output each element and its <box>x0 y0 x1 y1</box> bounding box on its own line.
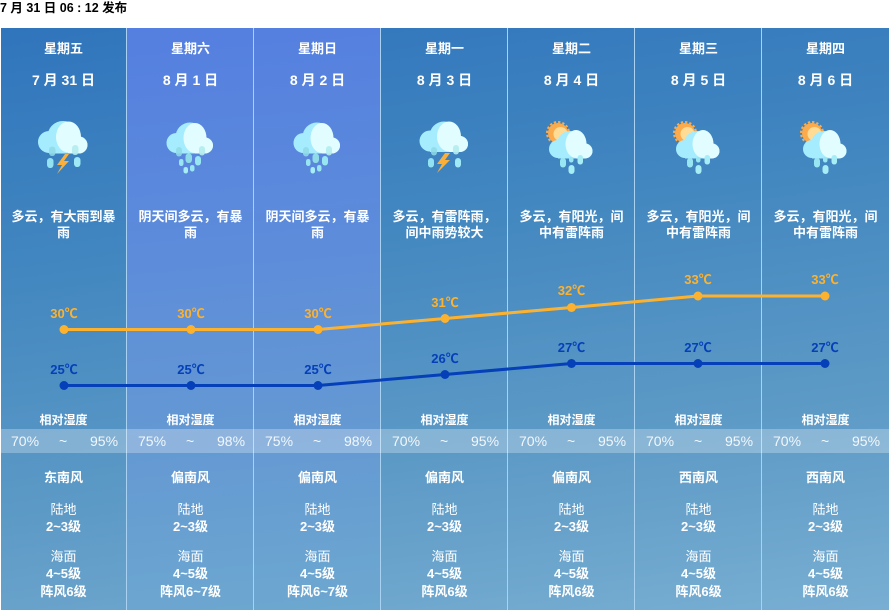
chart: high temperature line: 30℃ <box>50 306 78 321</box>
chart: high temperature line: 33℃ <box>811 272 839 287</box>
column: Sunday 8/2: 98% <box>344 433 372 449</box>
icon: sun and showers 8/5 <box>674 122 720 174</box>
chart: high temperature line: 31℃ <box>431 295 459 310</box>
column: Friday 7/31: 陆地 <box>50 502 76 517</box>
column: Friday 7/31: 东南风 <box>44 470 83 485</box>
column: Monday 8/3: 95% <box>471 433 499 449</box>
chart: low temperature line: 27℃ <box>684 340 712 355</box>
column: Tuesday 8/4: 2~3级 <box>554 519 589 534</box>
column: Thursday 8/6: 相对湿度 <box>801 413 850 427</box>
column: Friday 7/31: 多云，有大雨到暴雨 <box>11 209 116 240</box>
column: Sunday 8/2 <box>265 41 372 599</box>
chart: high temperature line: 33℃ <box>684 272 712 287</box>
chart: low temperature line: 25℃ <box>50 362 78 377</box>
column: Thursday 8/6: 西南风 <box>806 470 845 485</box>
column: Saturday 8/1: 海面 <box>177 549 204 564</box>
column: Tuesday 8/4: 相对湿度 <box>547 413 596 427</box>
column: Wednesday 8/5: 多云，有阳光，间中有雷阵雨 <box>646 209 750 240</box>
icon: thunderstorm 8/3 <box>420 122 468 173</box>
chart: high temperature line: 32℃ <box>558 283 585 298</box>
column: Friday 7/31: 星期五 <box>44 41 83 56</box>
column: Friday 7/31 <box>11 41 118 599</box>
column: Sunday 8/2: 星期日 <box>298 41 337 56</box>
column: Saturday 8/1: 98% <box>217 433 245 449</box>
column: Friday 7/31: 2~3级 <box>46 519 81 534</box>
column: Sunday 8/2: 海面 <box>304 549 330 564</box>
column: Monday 8/3: 偏南风 <box>425 470 464 485</box>
column: Saturday 8/1: 陆地 <box>177 502 204 517</box>
icon: heavy rain 8/1 <box>166 122 213 174</box>
column: Saturday 8/1: 2~3级 <box>173 519 208 534</box>
column: Monday 8/3: 4~5级 <box>427 566 462 581</box>
column: Wednesday 8/5 <box>646 41 753 599</box>
icon: sun and showers 8/4 <box>547 122 592 174</box>
chart: high temperature line: 30℃ <box>177 306 205 321</box>
column: Friday 7/31: 95% <box>90 433 118 449</box>
column: Tuesday 8/4: 星期二 <box>552 41 591 56</box>
column: Sunday 8/2: 陆地 <box>304 502 330 517</box>
highlighted weekend columns <box>127 28 380 610</box>
column: Wednesday 8/5: ~ <box>694 433 702 449</box>
column: Monday 8/3: 8 月 3 日 <box>417 72 472 88</box>
column: Thursday 8/6: 多云，有阳光，间中有雷阵雨 <box>773 209 878 240</box>
column: Friday 7/31: 相对湿度 <box>39 413 88 427</box>
column: Friday 7/31: 70% <box>11 433 39 449</box>
column: Wednesday 8/5: 海面 <box>685 549 712 564</box>
column: Wednesday 8/5: 西南风 <box>679 470 718 485</box>
column: Thursday 8/6: 星期四 <box>806 41 845 56</box>
column: Tuesday 8/4: 95% <box>598 433 626 449</box>
column: Wednesday 8/5: 阵风6级 <box>675 584 722 599</box>
column: Monday 8/3: 70% <box>392 433 420 449</box>
column: Tuesday 8/4: 陆地 <box>558 502 584 517</box>
column: Tuesday 8/4: 阵风6级 <box>548 584 595 599</box>
column: Wednesday 8/5: 4~5级 <box>681 566 716 581</box>
column: Wednesday 8/5: 相对湿度 <box>674 413 722 427</box>
column: Friday 7/31: 7 月 31 日 <box>32 72 95 88</box>
column: Monday 8/3: 海面 <box>431 549 458 564</box>
column: Saturday 8/1: 4~5级 <box>173 566 208 581</box>
column: Sunday 8/2: 相对湿度 <box>293 413 342 427</box>
chart: low temperature line: 25℃ <box>304 362 332 377</box>
column: Saturday 8/1: 相对湿度 <box>166 413 214 427</box>
column: Saturday 8/1: 星期六 <box>171 41 210 56</box>
column: Friday 7/31: 海面 <box>50 549 76 564</box>
column: Tuesday 8/4: ~ <box>567 433 575 449</box>
column: Saturday 8/1: 75% <box>138 433 166 449</box>
column: Saturday 8/1: 阴天间多云，有暴雨 <box>138 209 242 240</box>
column: Sunday 8/2: ~ <box>313 433 321 449</box>
column: Thursday 8/6: 95% <box>852 433 880 449</box>
column: Saturday 8/1: 阵风6~7级 <box>160 584 221 599</box>
chart: low temperature line: 25℃ <box>177 362 205 377</box>
icon: heavy rain 8/2 <box>294 122 340 174</box>
column: Monday 8/3: 阵风6级 <box>421 584 468 599</box>
column: Thursday 8/6: 8 月 6 日 <box>798 72 853 88</box>
column: Sunday 8/2: 4~5级 <box>300 566 335 581</box>
column: Monday 8/3: 陆地 <box>431 502 458 517</box>
column: Thursday 8/6: 2~3级 <box>808 519 843 534</box>
humidity band <box>1 429 889 453</box>
column: Thursday 8/6: 陆地 <box>812 502 838 517</box>
icon: thunderstorm 7/31 <box>38 121 88 174</box>
column: Saturday 8/1 <box>138 41 245 599</box>
column: Sunday 8/2: 偏南风 <box>298 470 337 485</box>
column: Sunday 8/2: 阴天间多云，有暴雨 <box>265 209 370 240</box>
column: Sunday 8/2: 阵风6~7级 <box>287 584 348 599</box>
column: Friday 7/31: ~ <box>59 433 67 449</box>
column: Monday 8/3: 星期一 <box>425 41 464 56</box>
column: Sunday 8/2: 2~3级 <box>300 519 335 534</box>
chart: low temperature line: 27℃ <box>558 340 585 355</box>
chart: low temperature line <box>50 340 839 390</box>
column: Wednesday 8/5: 星期三 <box>679 41 718 56</box>
chart: low temperature line: 26℃ <box>431 351 459 366</box>
column: Monday 8/3 <box>392 41 499 599</box>
column: Wednesday 8/5: 2~3级 <box>681 519 716 534</box>
column: Tuesday 8/4: 偏南风 <box>552 470 591 485</box>
column: Wednesday 8/5: 95% <box>725 433 753 449</box>
icon: sun and showers 8/6 <box>801 122 846 174</box>
column: Monday 8/3: ~ <box>440 433 448 449</box>
column: Thursday 8/6 <box>773 41 880 599</box>
column: Tuesday 8/4: 海面 <box>558 549 584 564</box>
column: Tuesday 8/4: 8 月 4 日 <box>544 72 599 88</box>
column: Friday 7/31: 4~5级 <box>46 566 81 581</box>
column: Tuesday 8/4: 4~5级 <box>554 566 589 581</box>
column: Sunday 8/2: 75% <box>265 433 293 449</box>
column: Wednesday 8/5: 70% <box>646 433 674 449</box>
publish time: 7 月 31 日 06 : 12 发布 <box>0 1 127 15</box>
column: Saturday 8/1: ~ <box>186 433 194 449</box>
column: Sunday 8/2: 8 月 2 日 <box>290 72 345 88</box>
column: Thursday 8/6: ~ <box>821 433 829 449</box>
column: Tuesday 8/4: 多云，有阳光，间中有雷阵雨 <box>519 209 624 240</box>
chart: high temperature line <box>50 272 839 334</box>
column: Monday 8/3: 相对湿度 <box>420 413 468 427</box>
column: Thursday 8/6: 海面 <box>812 549 838 564</box>
column: Wednesday 8/5: 陆地 <box>685 502 712 517</box>
column: Monday 8/3: 2~3级 <box>427 519 462 534</box>
chart: high temperature line: 30℃ <box>304 306 332 321</box>
column: Tuesday 8/4: 70% <box>519 433 547 449</box>
column: Saturday 8/1: 偏南风 <box>171 470 210 485</box>
column: Tuesday 8/4 <box>519 41 626 599</box>
column: Wednesday 8/5: 8 月 5 日 <box>671 72 726 88</box>
column: Thursday 8/6: 70% <box>773 433 801 449</box>
column: Thursday 8/6: 阵风6级 <box>802 584 849 599</box>
column: Monday 8/3: 多云，有雷阵雨，间中雨势较大 <box>392 209 496 240</box>
column: Friday 7/31: 阵风6级 <box>40 584 87 599</box>
chart: low temperature line: 27℃ <box>811 340 839 355</box>
column: Saturday 8/1: 8 月 1 日 <box>163 72 218 88</box>
column: Thursday 8/6: 4~5级 <box>808 566 843 581</box>
